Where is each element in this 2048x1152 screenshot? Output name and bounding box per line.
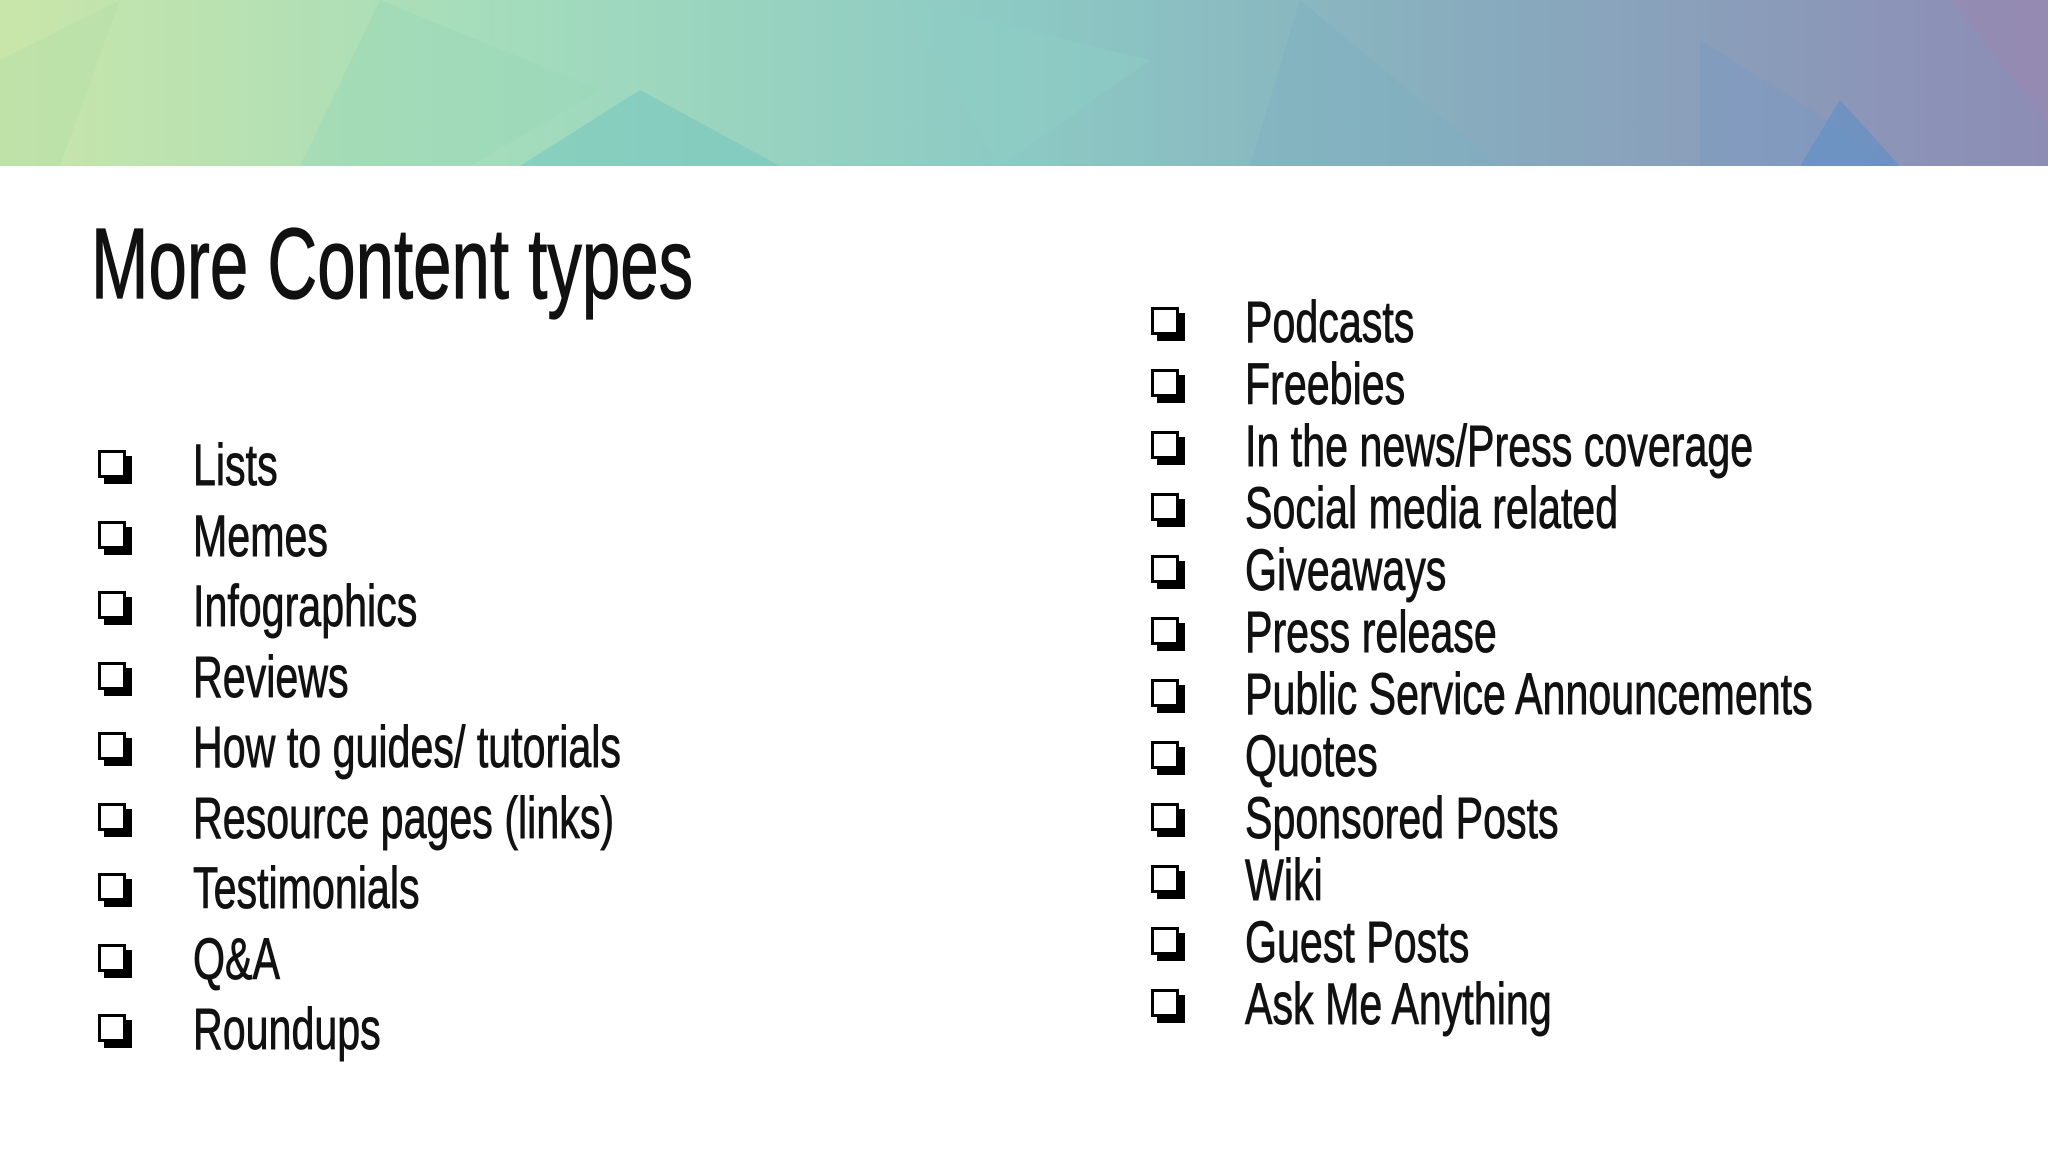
right list: Wiki: [1245, 848, 1323, 913]
left list: How to guides/ tutorials: [193, 715, 621, 780]
left list: Memes: [193, 504, 328, 568]
left list: Roundups: [193, 997, 381, 1062]
banner: [0, 0, 2048, 166]
right list: Quotes: [1245, 724, 1378, 789]
right list: Ask Me Anything: [1245, 972, 1552, 1037]
right list: Press release: [1245, 600, 1497, 665]
left list: Infographics: [193, 574, 417, 639]
right list: Social media related: [1245, 476, 1618, 541]
left list: [98, 433, 621, 1062]
right list: Podcasts: [1245, 290, 1414, 355]
right list: Public Service Announcements: [1245, 662, 1813, 727]
left list: Testimonials: [193, 856, 420, 921]
right list: In the news/Press coverage: [1245, 414, 1753, 479]
right list: Guest Posts: [1245, 910, 1469, 975]
right list: Giveaways: [1245, 538, 1446, 603]
right list: Freebies: [1245, 352, 1405, 417]
left list: Lists: [193, 433, 278, 498]
right list: Sponsored Posts: [1245, 786, 1559, 851]
left list: Resource pages (links): [193, 786, 614, 850]
right list: [1151, 290, 1813, 1037]
left list: Reviews: [193, 644, 349, 710]
title: More Content types: [91, 208, 693, 320]
left list: Q&A: [193, 926, 280, 992]
